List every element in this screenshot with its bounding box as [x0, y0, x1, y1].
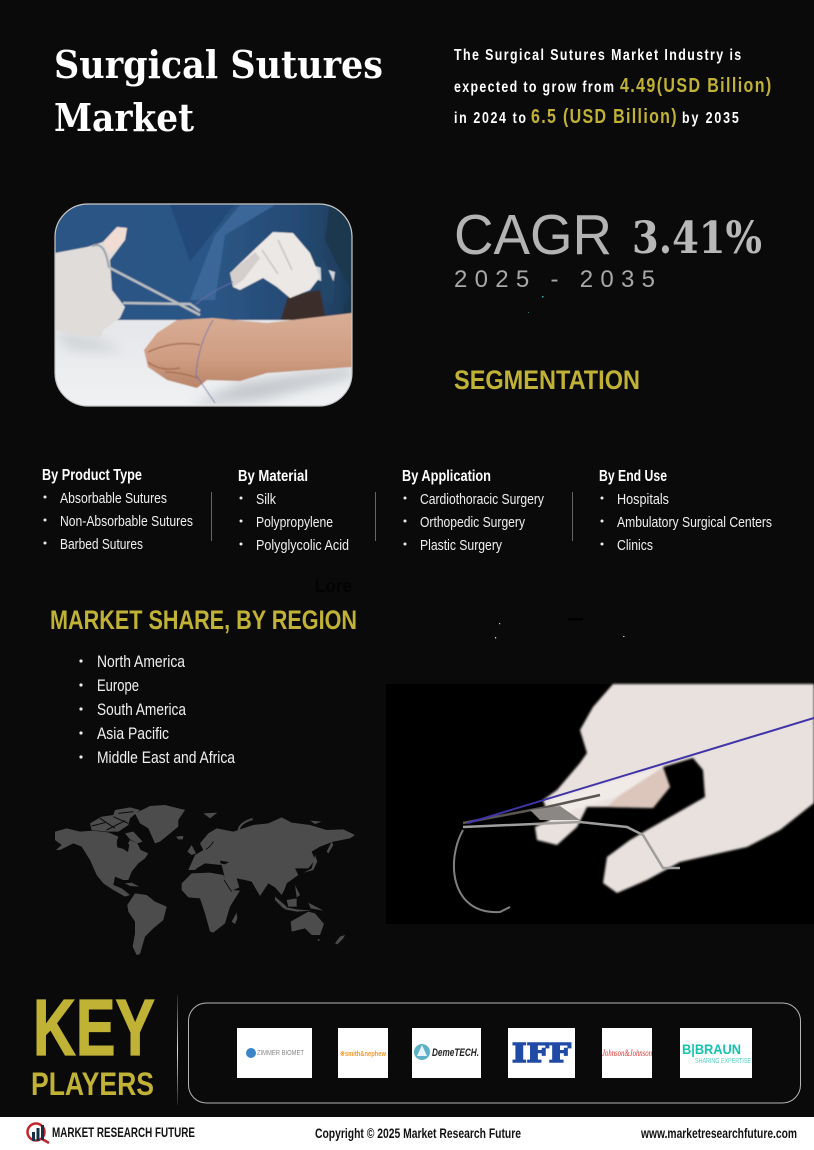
region list: South America	[97, 701, 187, 719]
heading: market share by region: MARKET SHARE, BY REGION	[50, 605, 357, 635]
CAGR figure: CAGR	[454, 203, 612, 267]
logo: zimmer biomet	[237, 1028, 312, 1078]
segment: by material: Polyglycolic Acid	[256, 538, 349, 554]
segment: by product type: Barbed Sutures	[60, 537, 143, 553]
segment: by application	[402, 468, 545, 554]
segment: by product type: Absorbable Sutures	[60, 491, 167, 507]
title: Market	[54, 95, 194, 140]
region list	[79, 653, 236, 767]
key players heading: KEY	[33, 983, 155, 1072]
footer logo icon	[28, 1124, 49, 1143]
photo: surgeon suturing a hand	[50, 200, 360, 410]
faint placeholder text: Lore	[315, 576, 352, 596]
heading: segmentation: SEGMENTATION	[454, 365, 640, 395]
market growth summary: in 2024 to	[454, 109, 526, 126]
market growth summary: 6.5 (USD Billion)	[531, 105, 677, 127]
key players heading: PLAYERS	[31, 1066, 154, 1102]
market growth summary: by 2035	[682, 109, 739, 126]
region list: Middle East and Africa	[97, 749, 236, 767]
logo: johnson and johnson	[602, 1028, 652, 1078]
segment: by end use: By End Use	[599, 468, 667, 485]
copyright: Copyright © 2025 Market Research Future	[315, 1126, 521, 1141]
logo: iff	[508, 1028, 575, 1078]
market growth summary: expected to grow from	[454, 78, 614, 95]
arm and hand	[144, 313, 352, 388]
right glove	[230, 232, 320, 298]
CAGR figure: 3.41%	[632, 213, 762, 264]
title	[54, 42, 383, 140]
market growth summary: The Surgical Sutures Market Industry is	[454, 46, 741, 63]
segment: by end use: Ambulatory Surgical Centers	[617, 515, 772, 531]
segment: by material: Polypropylene	[256, 515, 333, 531]
market growth summary	[454, 46, 771, 127]
market growth summary: 4.49(USD Billion)	[620, 74, 771, 96]
CAGR figure: 2025 - 2035	[454, 266, 655, 293]
logo: johnson and johnson: Johnson&Johnson	[602, 1048, 652, 1058]
segment: by application: Plastic Surgery	[420, 538, 503, 554]
segment: by end use: Hospitals	[617, 492, 669, 508]
segment: by product type: By Product Type	[42, 467, 142, 484]
title: Surgical Sutures	[54, 42, 383, 87]
region list: Europe	[97, 677, 139, 695]
region list: Asia Pacific	[97, 725, 169, 743]
key players panel	[188, 1003, 800, 1103]
segment: by application: Orthopedic Surgery	[420, 515, 526, 531]
logo: demetech: DemeTECH.	[432, 1047, 479, 1059]
segment: by material	[238, 468, 349, 554]
segment: by material: Silk	[256, 492, 277, 508]
region list: North America	[97, 653, 186, 671]
logo: zimmer biomet: ZIMMER BIOMET	[257, 1050, 305, 1057]
left glove	[55, 227, 127, 338]
key players heading	[31, 983, 155, 1102]
segment: by material: By Material	[238, 468, 308, 485]
photo: gloved hand holding needle and suture	[386, 684, 814, 924]
segment: by product type	[42, 467, 193, 553]
logo: b braun: B|BRAUN	[682, 1041, 741, 1057]
logo: smith and nephew: ※smith&nephew	[340, 1050, 386, 1058]
segment: by application: By Application	[402, 468, 491, 485]
CAGR figure	[454, 203, 762, 293]
thread	[195, 282, 233, 403]
logo: demetech	[412, 1028, 481, 1078]
forceps	[110, 268, 200, 315]
world map	[55, 805, 355, 955]
logo: iff: IFF	[512, 1039, 572, 1069]
logo: smith and nephew	[338, 1028, 388, 1078]
logo: b braun	[680, 1028, 752, 1078]
segment: by application: Cardiothoracic Surgery	[420, 492, 545, 508]
footer	[0, 1117, 814, 1150]
segment: by end use: Clinics	[617, 538, 653, 554]
footer brand name: MARKET RESEARCH FUTURE	[52, 1125, 195, 1140]
segment: by end use	[599, 468, 772, 554]
logo: b braun: SHARING EXPERTISE	[695, 1056, 751, 1065]
segment: by product type: Non-Absorbable Sutures	[60, 514, 193, 530]
